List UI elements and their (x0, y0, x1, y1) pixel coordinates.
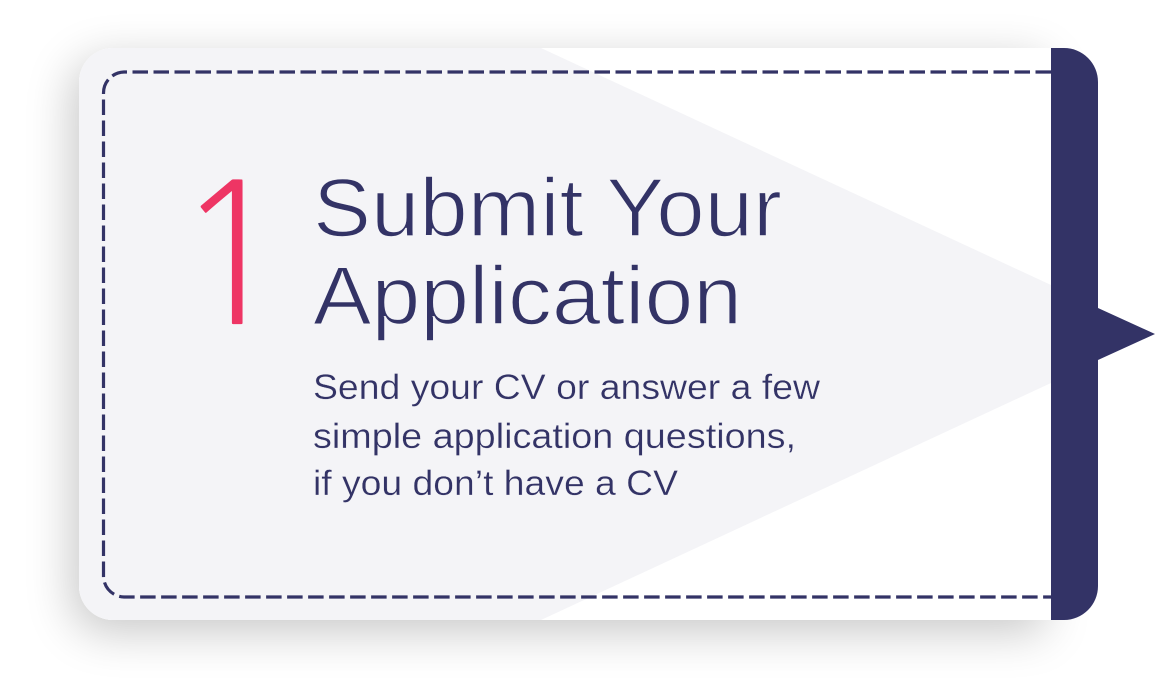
card background (79, 48, 1051, 620)
heading (313, 161, 782, 342)
navy side bar with pointer (1051, 48, 1155, 620)
heading line 2: Application (313, 249, 742, 342)
step number: 1 (171, 156, 291, 354)
grey arrow panel (79, 48, 1051, 620)
description line 3: if you don’t have a CV (313, 464, 679, 503)
dashed border (104, 72, 1051, 597)
card shadow (79, 48, 1051, 620)
description (313, 368, 821, 503)
description line 1: Send your CV or answer a few (313, 368, 821, 407)
heading line 1: Submit Your (313, 161, 782, 254)
description line 2: simple application questions, (313, 417, 796, 456)
